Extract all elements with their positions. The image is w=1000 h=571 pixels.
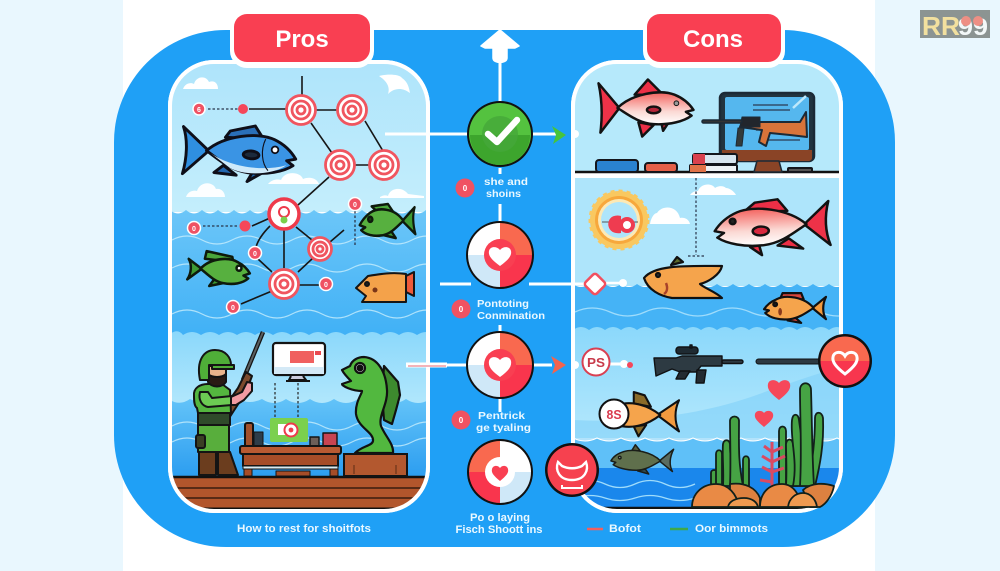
target network diagram: 0 (192, 226, 196, 233)
icon: heart gauge circle 2 (466, 331, 534, 399)
icon: blue fish (180, 121, 298, 185)
icon: heart gauge circle (466, 221, 534, 289)
label: Po o laying Fisch Shoott ins: Po o laying (470, 512, 530, 524)
legend (587, 523, 768, 535)
heading: Cons: Cons (683, 26, 743, 53)
barrel connector (756, 359, 821, 364)
panel: pros (168, 60, 442, 513)
badge: PS: PS (587, 355, 605, 370)
icon: sun badge (590, 191, 648, 249)
belt (198, 413, 230, 425)
green card icon (270, 418, 308, 442)
shelf items (596, 154, 812, 172)
rifle (222, 332, 263, 423)
icon: diamond node (584, 273, 627, 295)
logo: RR99 (920, 10, 990, 41)
target network diagram: 0 (353, 202, 357, 209)
icon: green serpent fish (342, 357, 400, 453)
dotted connector (688, 178, 704, 256)
icon: monitor (273, 343, 325, 381)
target nodes (270, 96, 398, 298)
heading: Cons (643, 11, 785, 68)
icon: assault rifle (654, 345, 743, 383)
label: Po o laying Fisch Shoott ins: Fisch Shoott ins (456, 524, 542, 536)
target network diagram: 0 (231, 305, 235, 312)
label: Po o laying Fisch Shoott ins (456, 512, 542, 536)
torso (194, 384, 231, 413)
label: Pentrick ge tyaling: ge tyaling (476, 423, 531, 434)
helmet (199, 350, 231, 380)
trousers (198, 424, 229, 452)
icon: green check circle (467, 101, 533, 167)
label: she and shoins: she and (484, 177, 528, 188)
icon: orange fish with badge: 8S (606, 407, 622, 422)
label: Pontoting Conmination (452, 299, 545, 322)
panel: cons (571, 60, 861, 513)
icon: orange fish big (644, 257, 722, 298)
icon: green arrow (552, 126, 566, 144)
pink connector segment (406, 362, 447, 368)
icon: computer with gun (702, 93, 814, 172)
center connectors (385, 60, 592, 412)
icon: red fish top (598, 80, 694, 136)
icon: up arrow (481, 30, 519, 62)
target network diagram (188, 76, 398, 314)
target network diagram: 6 (197, 107, 201, 114)
icon: red face badge (545, 443, 599, 497)
label: Pentrick ge tyaling: 0 (459, 416, 464, 425)
icon: green fish right (358, 202, 417, 241)
icon: red arrow (551, 356, 566, 374)
heading: Pros (230, 11, 374, 68)
icon: dark fish (610, 444, 674, 475)
icon: heart gauge circle 3 (467, 439, 533, 505)
label: Pentrick ge tyaling: Pentrick (478, 411, 526, 422)
node dot 2 (571, 361, 579, 369)
serpent pedestal (344, 454, 407, 476)
label: Pontoting Conmination: Conmination (477, 311, 545, 322)
main blue rounded panel (114, 30, 895, 547)
node dot (571, 130, 579, 138)
icon: orange fish with badge (600, 392, 679, 436)
node connectors (582, 362, 624, 366)
label: Pontoting Conmination: 0 (459, 305, 464, 314)
face and beard (208, 366, 226, 382)
icon: green fish left (187, 250, 251, 289)
boots (199, 452, 238, 475)
logo: RR99: RR (922, 11, 960, 41)
icon: orange fish small (764, 293, 826, 323)
legend: Oor bimmots (695, 523, 768, 535)
dotted connectors (275, 383, 298, 417)
icon: red fish large (713, 197, 831, 258)
heading: Pros: Pros (275, 26, 329, 53)
label: she and shoins: shoins (486, 189, 521, 200)
legend: Bofot (609, 523, 641, 535)
small dots (238, 104, 250, 232)
icon: orange box fish (356, 272, 414, 302)
desk (240, 423, 341, 476)
icon: red heart circle (818, 334, 872, 388)
logo: RR99: 99 (958, 14, 988, 41)
label: she and shoins (456, 177, 528, 200)
target network diagram: 0 (324, 282, 328, 289)
icon: seaweed and rocks (692, 383, 834, 507)
target network diagram: 0 (253, 251, 257, 258)
label: she and shoins: 0 (463, 184, 468, 193)
label: Pentrick ge tyaling (452, 410, 531, 434)
caption: How to rest for shoitfots: How to rest for shoitfots (237, 523, 371, 535)
arm and hands (199, 392, 238, 407)
badge: PS (582, 348, 633, 376)
connector to diamond (606, 282, 623, 284)
soldier illustration (194, 332, 263, 475)
icon: hearts (755, 380, 790, 427)
label: Pontoting Conmination: Pontoting (477, 299, 529, 310)
